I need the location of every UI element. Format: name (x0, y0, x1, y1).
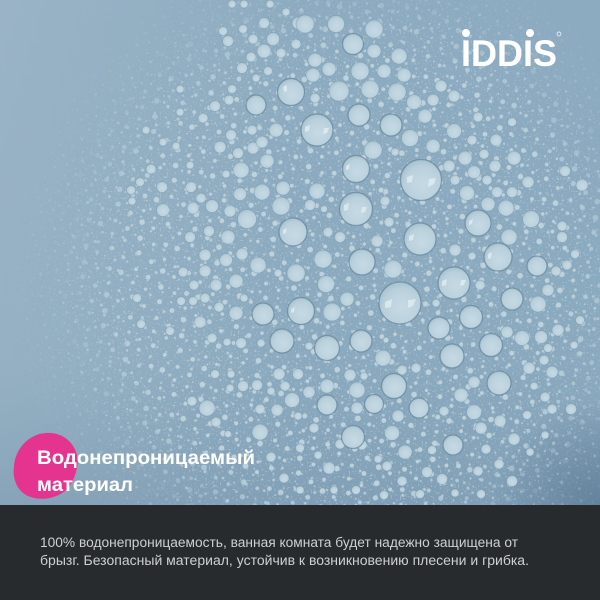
logo: IDDIS: IDDIS (461, 33, 557, 74)
heading: материал (37, 475, 133, 496)
pink blob behind heading (14, 433, 78, 499)
water drops: large with highlights (246, 34, 547, 455)
heading (37, 448, 255, 496)
description text: 100% водонепроницаемость, ванная комната будет надежно защищена от (40, 535, 518, 550)
water drops: small and medium (126, 0, 588, 500)
description text: брызг. Безопасный материал, устойчив к возникновению плесени и грибка. (40, 553, 529, 568)
heading: Водонепроницаемый (37, 448, 255, 469)
dark description panel (0, 505, 600, 600)
description text (40, 535, 529, 568)
